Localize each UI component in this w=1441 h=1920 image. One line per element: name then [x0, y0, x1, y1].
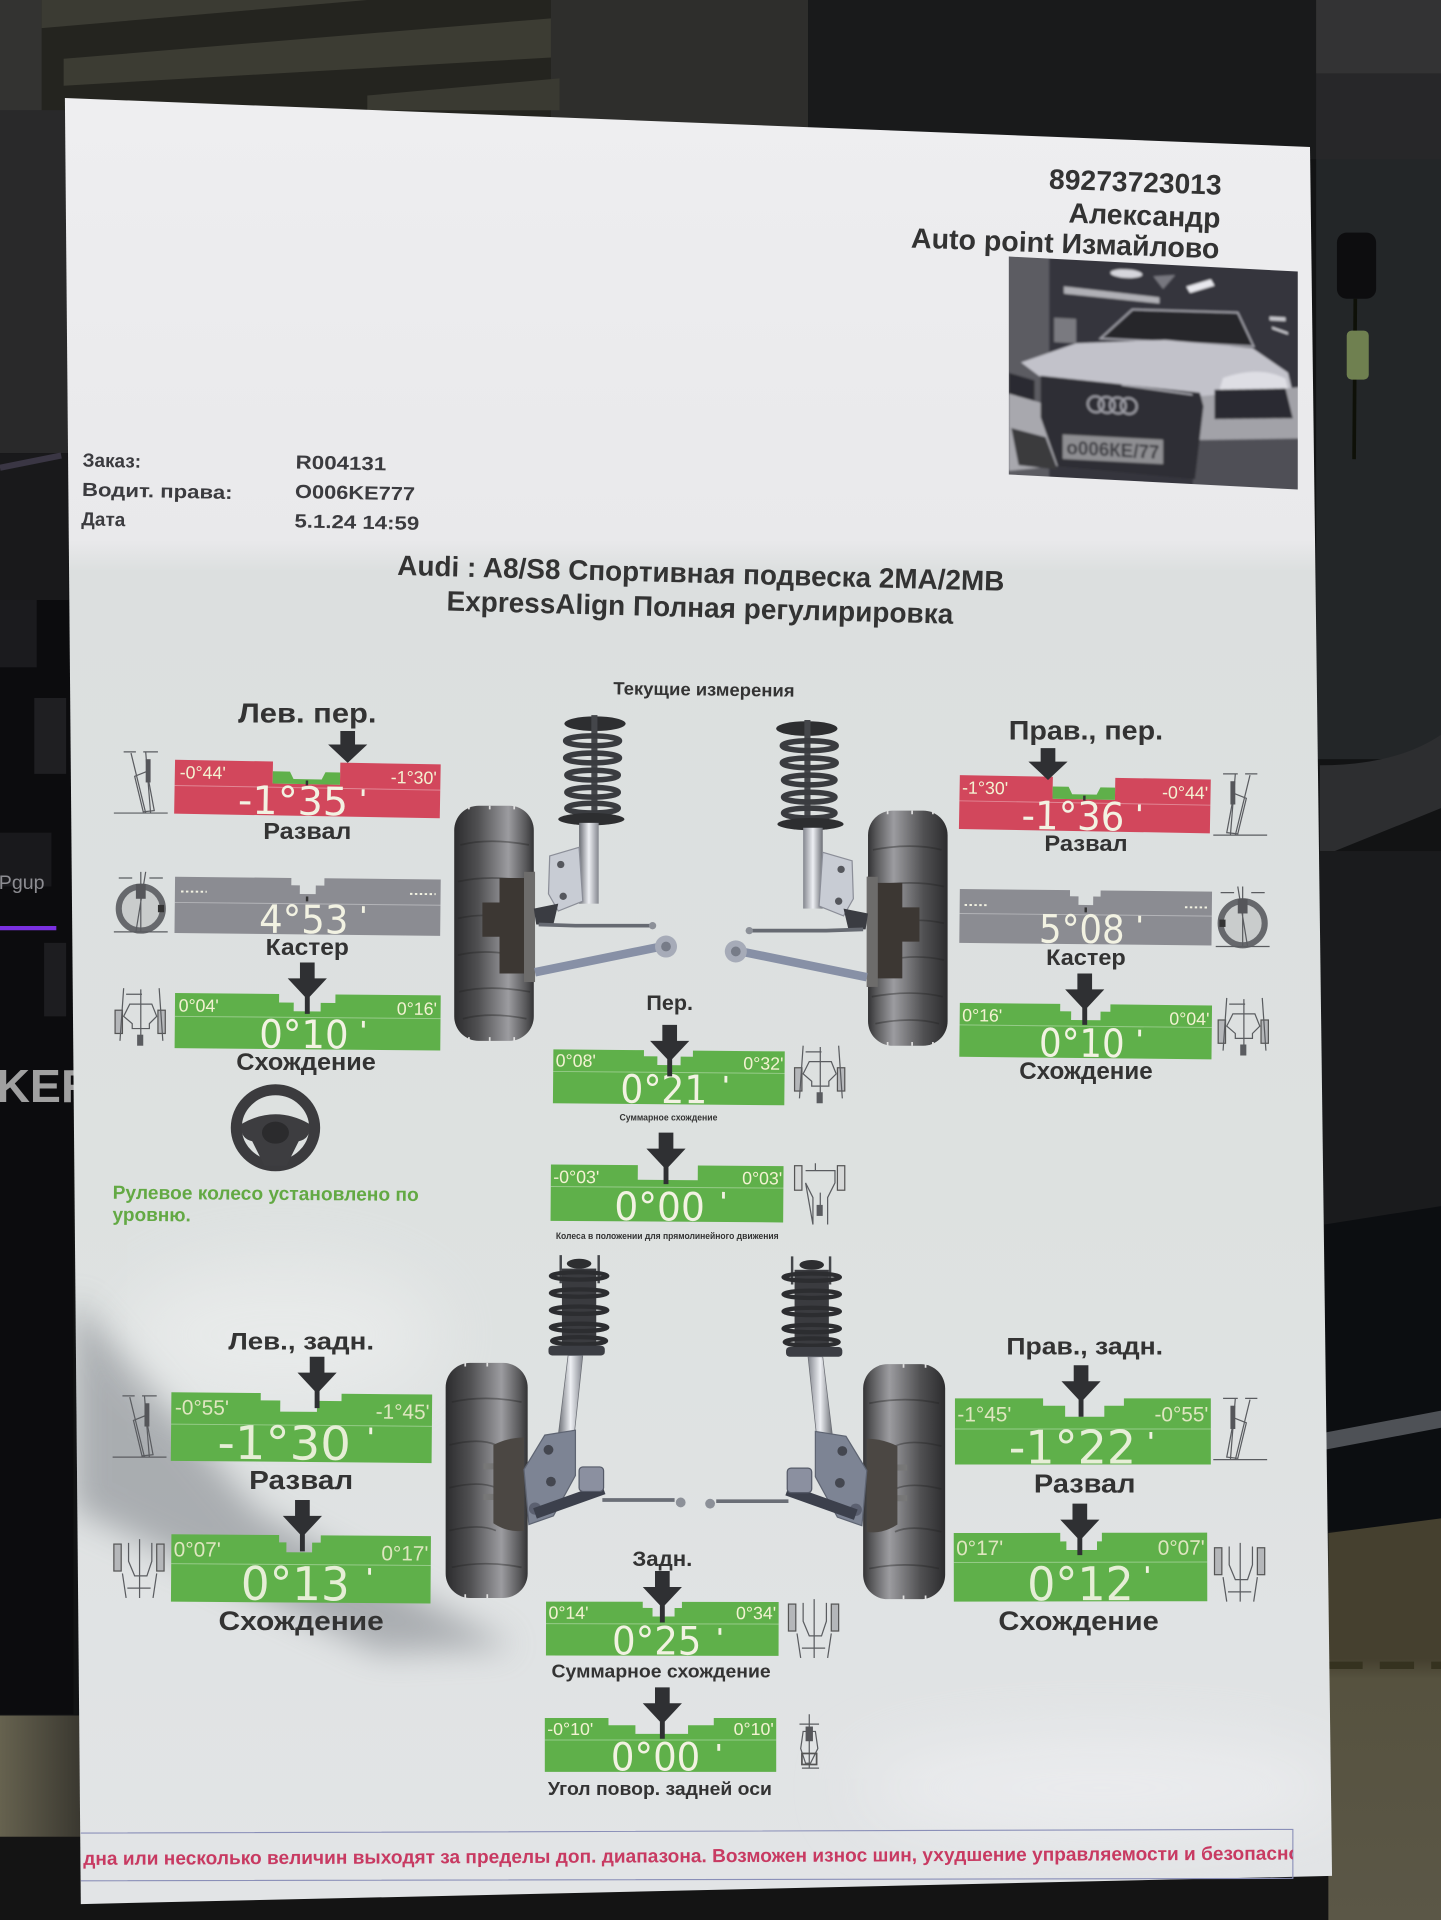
icon: rear toe [1215, 1543, 1265, 1602]
front suspension right [725, 720, 948, 1046]
gauge: left rear toe: 0°13 [241, 1557, 350, 1611]
label: camber: Развал [1034, 1469, 1136, 1499]
gauge: right front camber: ' [1135, 799, 1143, 828]
heading: left rear: Лев., задн. [228, 1328, 374, 1355]
gauge: right rear camber: ' [1147, 1427, 1155, 1456]
gauge: rear total toe: 0°34' [736, 1603, 776, 1623]
label: camber: Развал [263, 818, 351, 844]
gauge: left front caster [174, 877, 441, 945]
steering wheel status [112, 1183, 419, 1228]
gauge: front total toe: 0°32' [743, 1053, 784, 1074]
gauge: right rear toe: 0°17' [956, 1537, 1003, 1560]
gauge: right rear camber [955, 1398, 1211, 1474]
contact details: Александр [1068, 197, 1221, 234]
order information: O006KE777 [295, 482, 415, 505]
order information: Дата [81, 509, 126, 531]
arrow: left rear toe [283, 1500, 322, 1551]
contact details: 89273723013 [1049, 164, 1222, 201]
gauge: right front caster: ' [1136, 911, 1143, 940]
gauge: right front toe: 0°16' [962, 1005, 1002, 1026]
label: thrust angle: Угол повор. задней оси [548, 1778, 772, 1799]
arrow: rear thrust angle [643, 1687, 682, 1739]
label: straight ahead: Колеса в положении для прямолинейного движения [556, 1231, 779, 1241]
gauge: right rear camber: -1°22 [1009, 1420, 1136, 1474]
icon: toe [115, 988, 165, 1046]
gauge: left rear toe: 0°07' [174, 1538, 221, 1562]
gauge: left rear camber: -1°30 [217, 1416, 351, 1471]
icon: toe [1218, 998, 1268, 1056]
heading: left front: Лев. пер. [238, 697, 376, 728]
gauge: right front camber: -1°36 [1021, 794, 1125, 841]
gauge: left front toe: 0°04' [179, 995, 219, 1016]
arrow: right rear toe [1060, 1504, 1099, 1555]
heading: right front: Прав., пер. [1009, 716, 1163, 746]
vehicle photo [1004, 251, 1303, 495]
order information: R004131 [295, 453, 387, 475]
gauge: right front toe: 0°10 [1039, 1021, 1125, 1067]
gauge: steering centre: 0°00 [614, 1185, 705, 1231]
arrow: left rear camber [298, 1357, 337, 1408]
arrow: rear total toe [643, 1571, 682, 1622]
gauge: left front toe [175, 993, 441, 1059]
arrow: steering centre [646, 1133, 686, 1184]
panel: front axle totals [550, 991, 845, 1241]
gauge: front total toe: 0°21 [620, 1068, 707, 1113]
gauge: rear thrust angle [545, 1718, 776, 1781]
gauge: steering centre: -0°03' [553, 1167, 599, 1187]
order information [81, 448, 421, 537]
arrow: right front camber [1028, 748, 1068, 780]
gauge: right front toe [959, 1003, 1212, 1068]
heading: right rear: Прав., задн. [1006, 1333, 1163, 1360]
title: Audi : A8/S8 Спортивная подвеска 2MA/2MB [397, 550, 1005, 597]
gauge: right front toe: 0°04' [1169, 1009, 1210, 1029]
gauge: rear thrust angle: 0°10' [734, 1719, 774, 1739]
keyboard key legend: Pgup [0, 872, 45, 894]
panel: right front [959, 716, 1270, 1085]
label: toe: Схождение [219, 1606, 384, 1636]
icon: straight ahead [795, 1163, 845, 1224]
gauge: right rear camber: -0°55' [1154, 1404, 1208, 1427]
contact details [911, 159, 1222, 264]
gauge: left front camber: -1°35 [238, 779, 349, 825]
rear suspension left [446, 1255, 686, 1598]
panel: rear axle totals [545, 1547, 839, 1799]
gauge: left rear camber: ' [367, 1422, 375, 1451]
gauge: right front caster [959, 889, 1212, 954]
gauge: left front toe: ' [359, 1016, 367, 1045]
gauge: left front camber: ' [359, 784, 367, 813]
heading: current measurements: Текущие измерения [613, 678, 795, 701]
gauge: left front camber [174, 760, 441, 827]
gauge: right rear toe: 0°12 [1027, 1557, 1134, 1611]
heading: front: Пер. [646, 991, 693, 1015]
gauge: steering centre: 0°03' [742, 1168, 782, 1188]
icon: steering wheel [236, 1090, 315, 1166]
arrow: right rear camber [1061, 1365, 1101, 1417]
gauge: left rear camber: -0°55' [175, 1396, 229, 1420]
gauge: steering centre [550, 1164, 784, 1231]
gauge: left front caster: ' [359, 901, 367, 930]
vehicle photo: о006КЕ/77 [1066, 437, 1159, 464]
rear suspension right [705, 1256, 945, 1599]
icon: camber [1213, 774, 1267, 835]
icon: caster [114, 872, 168, 932]
icon: front total toe [795, 1046, 845, 1103]
gauge: left front caster: 4°53 [259, 898, 349, 944]
gauge: rear total toe: ' [716, 1623, 724, 1652]
gauge: steering centre: ' [720, 1187, 727, 1216]
panel: right rear [954, 1333, 1267, 1636]
gauge: left front camber: -1°30' [391, 767, 437, 788]
gauge: right front caster: 5°08 [1039, 907, 1125, 953]
gauge: right rear toe: 0°07' [1158, 1537, 1205, 1560]
gauge: left rear toe: ' [366, 1563, 373, 1592]
gauge: rear thrust angle: ' [715, 1739, 722, 1768]
icon: camber [114, 752, 168, 813]
icon: rear toe [114, 1539, 164, 1598]
gauge: right front camber [959, 775, 1211, 842]
gauge: left front toe: 0°10 [259, 1013, 349, 1058]
gauge: left front toe: 0°16' [397, 999, 437, 1019]
label: total toe: Суммарное схождение [619, 1112, 717, 1122]
order information: Заказ: [82, 451, 141, 473]
icon: caster [1216, 887, 1270, 947]
panel: left rear [113, 1328, 432, 1636]
gauge: left rear camber [171, 1392, 432, 1472]
contact details: Auto point Измайлово [911, 223, 1220, 264]
arrow: left front camber [328, 731, 367, 763]
icon: rear toe [788, 1599, 839, 1658]
gauge: front total toe [553, 1049, 785, 1114]
title: ExpressAlign Полная регулирировка [446, 586, 954, 630]
icon: camber [113, 1396, 167, 1457]
label: caster: Кастер [266, 934, 349, 960]
label: toe: Схождение [998, 1606, 1159, 1636]
front suspension left [454, 715, 677, 1041]
gauge: right rear toe [954, 1533, 1207, 1611]
icon: thrust angle [799, 1714, 819, 1768]
gauge: left front camber: -0°44' [180, 762, 226, 783]
gauge: left rear toe [171, 1534, 431, 1612]
icon: camber [1213, 1398, 1267, 1460]
gauge: right front camber: -0°44' [1162, 782, 1208, 803]
order information: 5.1.24 14:59 [294, 511, 420, 535]
gauge: rear thrust angle: 0°00 [611, 1736, 700, 1781]
label: toe: Схождение [1019, 1058, 1153, 1085]
gauge: right rear camber: -1°45' [957, 1404, 1011, 1427]
gauge: front total toe: ' [722, 1071, 730, 1100]
gauge: rear total toe: 0°14' [548, 1603, 589, 1623]
label: rear total toe: Суммарное схождение [552, 1661, 771, 1682]
gauge: right front camber: -1°30' [962, 778, 1008, 798]
warning footer [81, 1829, 1300, 1881]
arrow: left front toe [288, 962, 327, 1014]
title [396, 550, 1005, 631]
label: camber: Развал [1044, 831, 1128, 856]
gauge: rear total toe [546, 1602, 779, 1665]
label: toe: Схождение [236, 1049, 376, 1076]
warning footer: дна или несколько величин выходят за пределы доп. диапазона. Возможен износ шин, ухудшение управляемости и безопасно [83, 1844, 1300, 1870]
panel: left front [114, 697, 441, 1076]
gauge: rear thrust angle: -0°10' [547, 1719, 593, 1739]
gauge: rear total toe: 0°25 [612, 1619, 701, 1665]
steering wheel status: уровню. [112, 1205, 191, 1226]
label: caster: Кастер [1046, 945, 1126, 970]
arrow: right front toe [1065, 973, 1104, 1025]
gauge: left rear toe: 0°17' [381, 1542, 428, 1566]
arrow: front total toe [650, 1025, 689, 1076]
heading: rear: Задн. [632, 1547, 692, 1571]
gauge: right rear toe: ' [1144, 1561, 1151, 1590]
gauge: front total toe: 0°08' [556, 1051, 596, 1071]
gauge: right front toe: ' [1136, 1025, 1143, 1054]
label: camber: Развал [249, 1465, 353, 1495]
order information: Водит. права: [82, 480, 233, 504]
steering wheel status: Рулевое колесо установлено по [113, 1183, 419, 1206]
gauge: left rear camber: -1°45' [376, 1401, 430, 1424]
